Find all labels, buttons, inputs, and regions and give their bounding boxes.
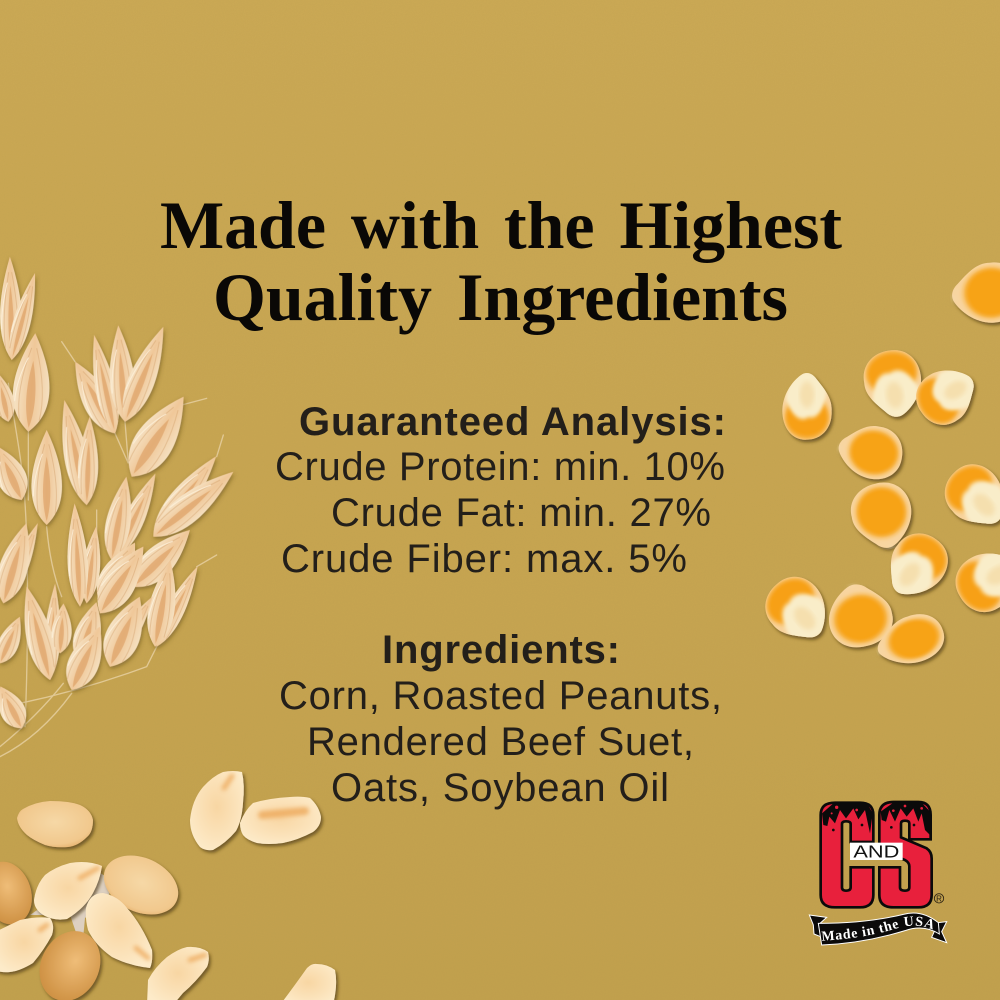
peanut: half cluster top [34,862,102,920]
peanut: half upright [190,771,244,850]
logo: C and S [808,800,948,946]
peanut skin: pale background in the cluster [30,870,112,950]
corn kernel: left [782,370,832,440]
corn kernel: bottom left [755,566,842,655]
illustration: oat sprig [0,256,242,757]
peanut: half bottom right [280,964,336,1000]
logo registered mark: R [936,894,942,903]
logo letter: C [821,803,873,907]
text block: ingredients: Oats, Soybean Oil [331,766,669,810]
peanut: far left [0,855,40,931]
peanut: whole cluster right [94,844,188,926]
peanut: lone left [17,801,93,847]
peanut: half bottom [147,947,209,1000]
illustration: corn kernels [755,260,1000,673]
logo banner: Made in the USA [821,916,933,941]
corn kernel: top right [949,260,1000,326]
logo registered mark [934,894,944,903]
corn kernel: lower far right [946,538,1000,622]
text block: ingredients: Corn, Roasted Peanuts, [279,674,722,718]
text block: guaranteed analysis: Crude Fiber: max. 5% [281,537,687,581]
title: Made with the Highest [160,187,842,263]
corn kernel: bottom right [870,607,950,673]
corn kernel: lower centre [873,523,958,610]
title [160,187,842,335]
corn kernel: upper right [907,356,988,434]
peanut: dark bottom [29,921,111,1000]
peanut: half horizontal [240,797,321,844]
logo AND box: AND [853,842,899,862]
title: Quality Ingredients [213,259,788,335]
logo flame highlights [831,805,923,814]
corn kernel: far right [934,454,1000,541]
logo AND box [850,842,903,862]
corn kernel: upper centre [860,347,926,423]
illustration: peanuts [0,771,336,1000]
corn kernel: centre [846,477,918,555]
text block: guaranteed analysis: Guaranteed Analysis: [299,400,726,444]
text block: guaranteed analysis: Crude Protein: min. 10% [275,445,725,489]
peanut: half left [0,917,53,972]
text block: guaranteed analysis [275,400,726,581]
peanut details: creases and germ marks [40,776,305,960]
text block: ingredients: Ingredients: [382,628,620,672]
corn kernel: middle [834,420,907,484]
logo flames [822,803,930,835]
text block: guaranteed analysis: Crude Fat: min. 27% [331,491,711,535]
corn kernel: bottom centre [822,577,898,653]
logo letter: S [879,802,932,907]
text block: ingredients [279,628,722,810]
text block: ingredients: Rendered Beef Suet, [307,720,694,764]
peanut: half cluster lower [86,893,152,968]
